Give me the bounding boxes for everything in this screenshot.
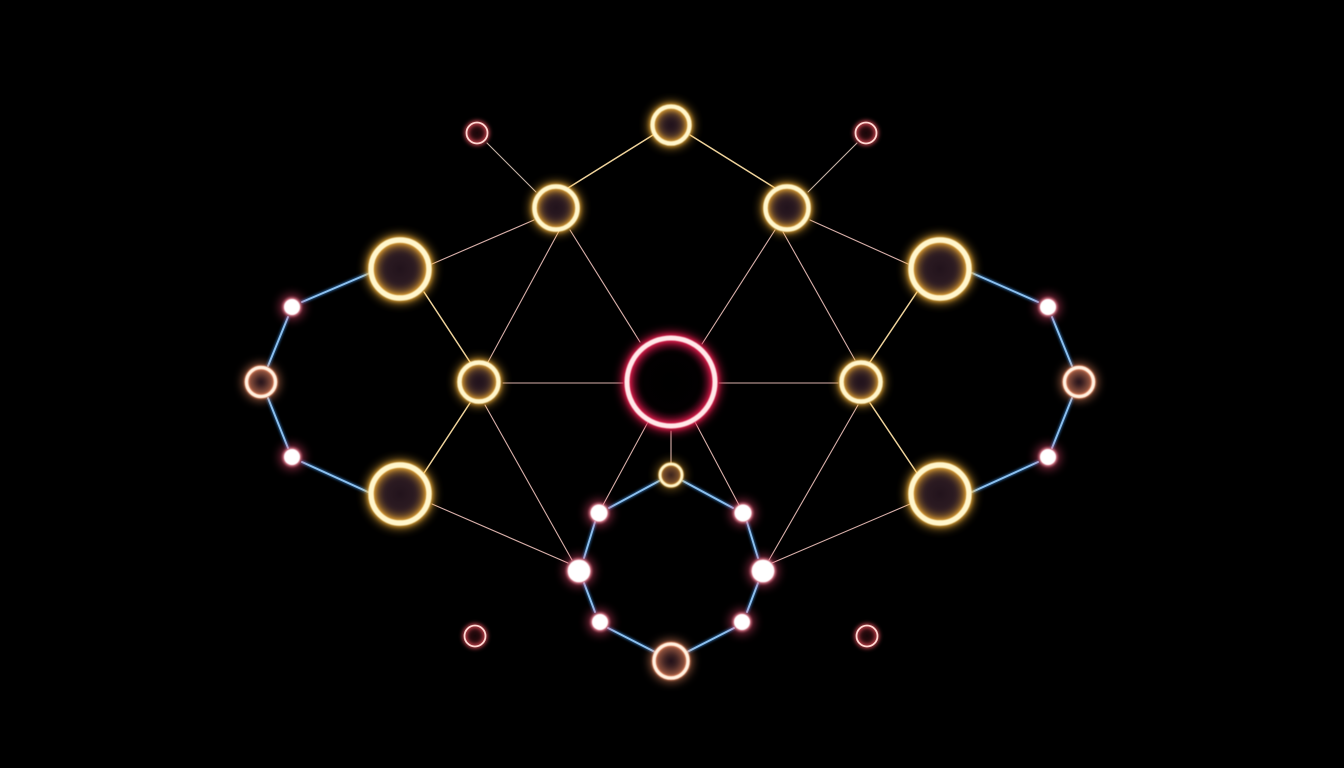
large glowing dot: lower ring left [564, 556, 594, 586]
glowing dot: lower ring bottom right [730, 610, 754, 634]
glowing dot: lower ring upper left [586, 500, 612, 526]
medium gold node: middle right [842, 362, 880, 402]
pink ring node: top right [856, 122, 876, 144]
gold connectors [424, 135, 917, 473]
thin pink connectors [432, 143, 910, 563]
medium gold node: middle left [460, 362, 498, 402]
medium gold node: top [652, 106, 690, 144]
white ring node: far right [1064, 368, 1094, 396]
white ring node: bottom [654, 644, 688, 678]
pink ring node: bottom right [856, 626, 878, 646]
pink ring node: top left [466, 122, 488, 144]
large glowing dot: lower ring right [748, 556, 778, 586]
large gold node: upper left [371, 240, 429, 298]
pink ring node: bottom left [464, 626, 486, 646]
glowing dot: lower ring upper right [730, 500, 756, 526]
glowing dot: lower ring bottom left [588, 610, 612, 634]
large gold node: lower right [911, 465, 969, 523]
white ring node: far left [246, 368, 276, 396]
central crimson node [627, 338, 715, 426]
large gold node: upper right [911, 240, 969, 298]
medium gold node: upper right [766, 186, 808, 230]
blue connector loops [268, 273, 1072, 652]
glowing dot: right lower [1036, 445, 1060, 469]
small gold node: below centre [660, 464, 682, 486]
glowing dot: right upper [1036, 295, 1060, 319]
large gold node: lower left [371, 465, 429, 523]
medium gold node: upper left [534, 186, 578, 230]
glowing dot: left lower [280, 445, 304, 469]
glowing dot: left upper [280, 295, 304, 319]
